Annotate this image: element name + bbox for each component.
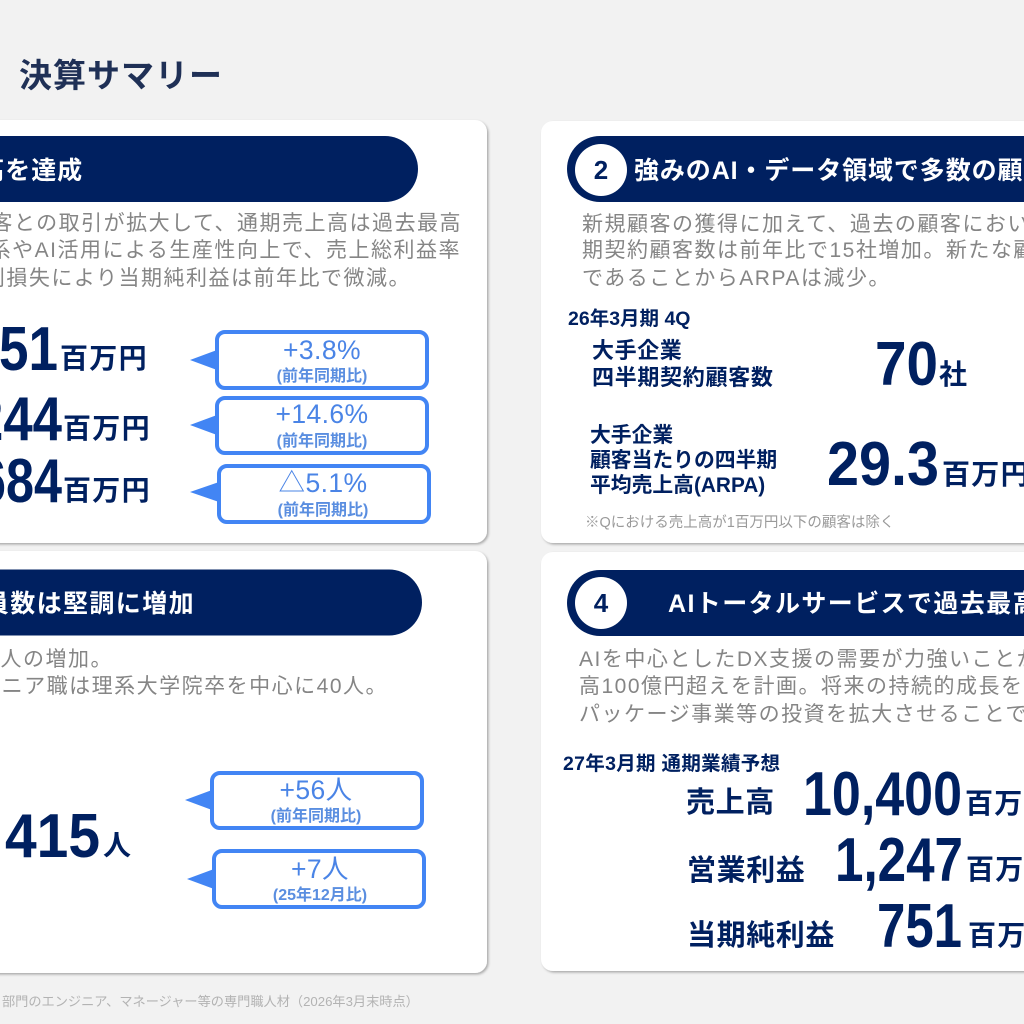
metric: sales: 10,400	[803, 760, 962, 829]
callout: +7: (25年12月比)	[273, 885, 367, 904]
metric: sales: 百万	[965, 788, 1024, 819]
metric: operating profit: 百万	[966, 854, 1024, 885]
heading pill 4	[567, 570, 1024, 636]
metric: row 2: 百万円	[63, 413, 151, 444]
callout: +7	[187, 851, 424, 907]
metric: net profit: 当期純利益	[687, 919, 835, 952]
metric: quarterly contract customers: 70	[875, 330, 938, 399]
panel: 4 forecast	[541, 552, 1024, 971]
title: 決算サマリー	[19, 57, 223, 94]
callout: +14.6%	[190, 398, 427, 453]
callout: triangle 5.1%	[190, 466, 429, 522]
callout: triangle 5.1%: △5.1%	[279, 468, 367, 498]
body text 2: 新規顧客の獲得に加えて、過去の顧客におい	[582, 213, 1024, 236]
metric: row 3	[0, 447, 151, 516]
heading pill 3	[0, 570, 422, 636]
metric: quarterly contract customers: 社	[939, 359, 968, 390]
heading pill 2: 2	[594, 155, 608, 185]
metric: operating profit	[687, 826, 1024, 895]
callout: triangle 5.1%: (前年同期比)	[278, 500, 368, 519]
callout: +3.8%	[190, 332, 427, 388]
body text 4: パッケージ事業等の投資を拡大させることで	[579, 703, 1024, 726]
metric: sales: 売上高	[686, 786, 775, 819]
metric: ARPA: 29.3	[827, 430, 939, 499]
metric: row 3: 百万円	[63, 475, 151, 506]
heading pill 2: 強みのAI・データ領域で多数の顧	[634, 156, 1023, 185]
metric: ARPA	[590, 424, 1024, 499]
metric: 415 people: 415	[5, 802, 100, 871]
body text 2: であることからARPAは減少。	[582, 267, 891, 290]
metric: 415 people: 人	[103, 830, 132, 861]
metric: ARPA: 顧客当たりの四半期	[590, 449, 777, 472]
body text 2	[582, 213, 1024, 290]
metric: net profit	[687, 892, 1024, 961]
callout: +56: +56人	[279, 775, 353, 805]
callout: +56: (前年同期比)	[271, 806, 361, 825]
heading pill 1	[0, 136, 418, 202]
callout: +14.6%: +14.6%	[275, 399, 369, 429]
body text 4	[579, 648, 1024, 726]
body text 2: 期契約顧客数は前年比で15社増加。新たな顧	[582, 239, 1024, 262]
period label: 26年3月期 4Q	[568, 307, 690, 330]
body text 3	[0, 648, 388, 698]
panel: 2 AI and data	[541, 121, 1024, 543]
metric: row 1: 百万円	[60, 343, 148, 374]
body text 1	[0, 212, 462, 290]
metric: ARPA: 大手企業	[590, 424, 673, 447]
callout: +56	[185, 773, 422, 828]
metric: quarterly contract customers: 四半期契約顧客数	[592, 365, 774, 390]
metric: operating profit: 営業利益	[687, 854, 805, 887]
heading pill 4: 4	[594, 588, 609, 618]
period label: 27年3月期 通期業績予想	[563, 752, 780, 775]
heading pill 2	[567, 136, 1024, 202]
panel: 3 headcount	[0, 551, 487, 973]
callout: +3.8%: (前年同期比)	[277, 366, 367, 385]
panel: 1 results	[0, 120, 487, 543]
callout: +7: +7人	[291, 854, 349, 884]
metric: row 2	[0, 385, 151, 454]
metric: quarterly contract customers	[592, 330, 968, 399]
metric: sales	[686, 760, 1024, 829]
metric: ARPA: 平均売上高(ARPA)	[590, 474, 765, 497]
footnote: ※Qにおける売上高が1百万円以下の顧客は除く	[585, 514, 894, 531]
metric: row 1	[0, 315, 148, 384]
metric: row 1: 51	[0, 315, 58, 384]
callout: +14.6%: (前年同期比)	[277, 431, 367, 450]
body text 4: 高100億円超えを計画。将来の持続的成長を	[579, 675, 1024, 698]
metric: quarterly contract customers: 大手企業	[592, 338, 682, 363]
callout: +3.8%: +3.8%	[283, 335, 361, 365]
footnote: headcount definition: 部門のエンジニア、マネージャー等の専門職人材（2026年3月末時点）	[2, 993, 419, 1009]
body text 1: 客との取引が拡大して、通期売上高は過去最高	[0, 212, 462, 235]
metric: operating profit: 1,247	[835, 826, 963, 895]
metric: net profit: 751	[877, 892, 962, 961]
body text 1: 系やAI活用による生産性向上で、売上総利益率	[0, 239, 461, 262]
